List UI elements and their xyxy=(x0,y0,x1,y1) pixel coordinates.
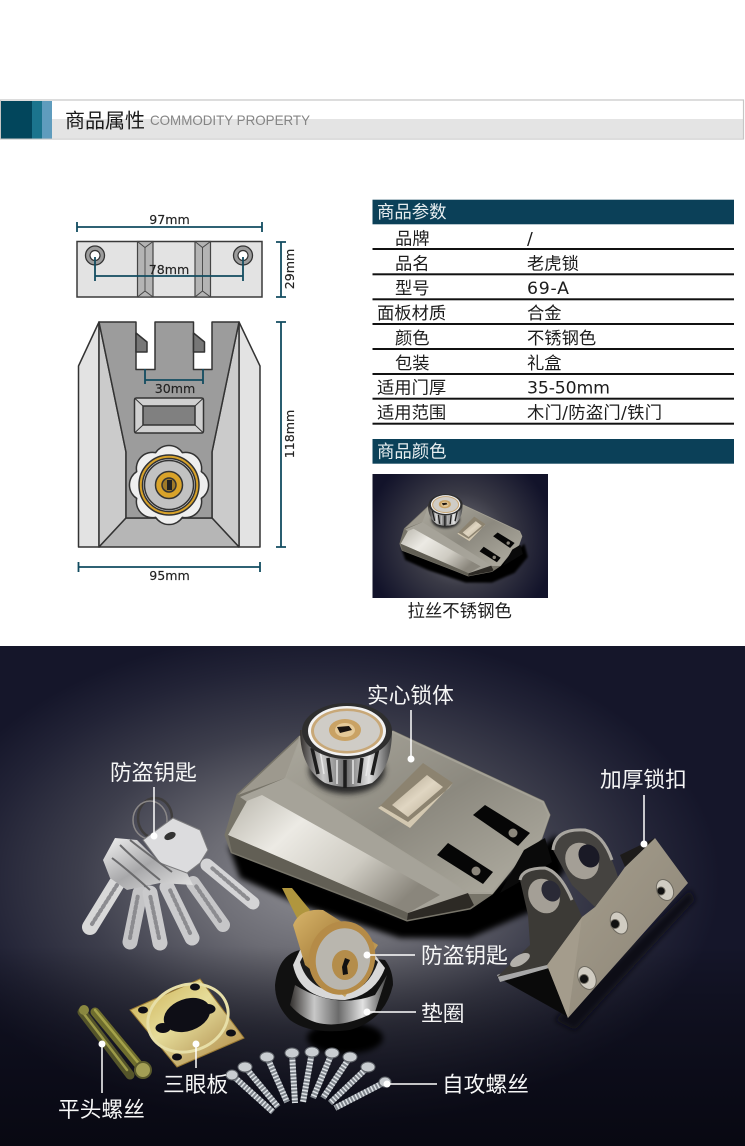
callout: washer: 垫圈 xyxy=(421,1001,464,1026)
row: colour xyxy=(395,329,596,349)
callout: anti-theft keys xyxy=(110,760,197,840)
callout: three-hole plate: 三眼板 xyxy=(163,1072,228,1097)
row: door thickness: 适用门厚 xyxy=(377,378,446,398)
row: applicable range: 适用范围 xyxy=(377,404,446,424)
dimension 95mm xyxy=(78,562,260,583)
hasp holes xyxy=(574,877,677,992)
row: panel material: 面板材质 xyxy=(377,304,446,324)
row: door thickness: 35-50mm xyxy=(527,378,610,398)
latch window xyxy=(378,763,453,828)
dimension 97mm xyxy=(77,212,262,232)
dimension 30mm: 30mm xyxy=(155,381,195,396)
hasp photo xyxy=(497,830,695,1030)
colour heading: 商品颜色 xyxy=(377,442,447,462)
row: brand: 品牌 xyxy=(395,230,430,250)
row: model: 型号 xyxy=(395,279,430,299)
row: model xyxy=(395,279,569,299)
dimension 29mm xyxy=(276,242,297,297)
callout: flat-head bolts: 平头螺丝 xyxy=(58,1097,145,1122)
callout: washer xyxy=(364,1001,464,1026)
washer photo xyxy=(275,950,393,1054)
panel: product parameters table xyxy=(372,200,734,425)
dimension 78mm: 78mm xyxy=(149,262,189,277)
callout: solid lock body xyxy=(367,683,454,762)
dimension drawing: hasp plate xyxy=(77,242,262,297)
row: brand xyxy=(395,230,533,250)
row: brand: / xyxy=(527,230,533,250)
callout: flat-head bolts xyxy=(58,1040,145,1122)
header subtitle: COMMODITY PROPERTY xyxy=(150,113,310,128)
row: model: 69-A xyxy=(527,279,569,299)
slots xyxy=(473,805,530,846)
row: colour: 颜色 xyxy=(395,329,430,349)
table heading xyxy=(372,200,734,224)
callout: anti-theft keys: 防盗钥匙 xyxy=(110,760,197,785)
dimension drawing: lock body xyxy=(78,322,260,547)
dimension 118mm: 118mm xyxy=(282,410,297,458)
row: packaging xyxy=(395,354,562,374)
row: applicable range xyxy=(377,404,662,424)
self-tapping screws photo xyxy=(226,1047,391,1112)
callout: self-tapping screws: 自攻螺丝 xyxy=(442,1072,529,1097)
colour heading xyxy=(372,439,734,464)
row: colour: 不锈钢色 xyxy=(527,329,596,349)
callout: cylinder key: 防盗钥匙 xyxy=(421,943,508,968)
row: door thickness xyxy=(377,378,610,398)
colour swatch photo xyxy=(372,474,548,598)
flat-head bolts photo xyxy=(79,1005,151,1078)
keys photo xyxy=(90,798,253,943)
row: packaging: 包装 xyxy=(395,354,430,374)
section header bar xyxy=(0,100,745,139)
row: packaging: 礼盒 xyxy=(527,354,562,374)
panel: dark product photo xyxy=(0,646,745,1146)
row: product name: 品名 xyxy=(395,254,430,274)
callout: self-tapping screws xyxy=(384,1072,529,1097)
row: panel material xyxy=(377,304,562,324)
row: product name: 老虎锁 xyxy=(527,254,579,274)
lock body photo xyxy=(226,703,565,938)
callout: solid lock body: 实心锁体 xyxy=(367,683,454,708)
dimension 29mm: 29mm xyxy=(282,249,297,289)
callout: thick hasp: 加厚锁扣 xyxy=(600,767,687,792)
dimension 118mm xyxy=(276,322,297,547)
row: applicable range: 木门/防盗门/铁门 xyxy=(527,404,662,424)
header title: 商品属性 xyxy=(65,110,145,132)
lock cylinder photo xyxy=(282,888,383,1002)
mounting plate photo xyxy=(130,973,244,1067)
dimension 30mm xyxy=(145,369,203,396)
callout: cylinder key xyxy=(364,943,508,968)
hasp eyelets xyxy=(497,830,618,977)
dimension 95mm: 95mm xyxy=(149,568,190,583)
callout: thick hasp xyxy=(600,767,687,848)
lock knob xyxy=(129,445,209,525)
knob xyxy=(309,746,385,794)
row: panel material: 合金 xyxy=(527,304,562,324)
dimension 97mm: 97mm xyxy=(149,212,190,227)
table heading: 商品参数 xyxy=(377,202,447,222)
callout: three-hole plate xyxy=(163,1040,228,1097)
row: product name xyxy=(395,254,579,274)
colour caption: 拉丝不锈钢色 xyxy=(408,601,512,621)
